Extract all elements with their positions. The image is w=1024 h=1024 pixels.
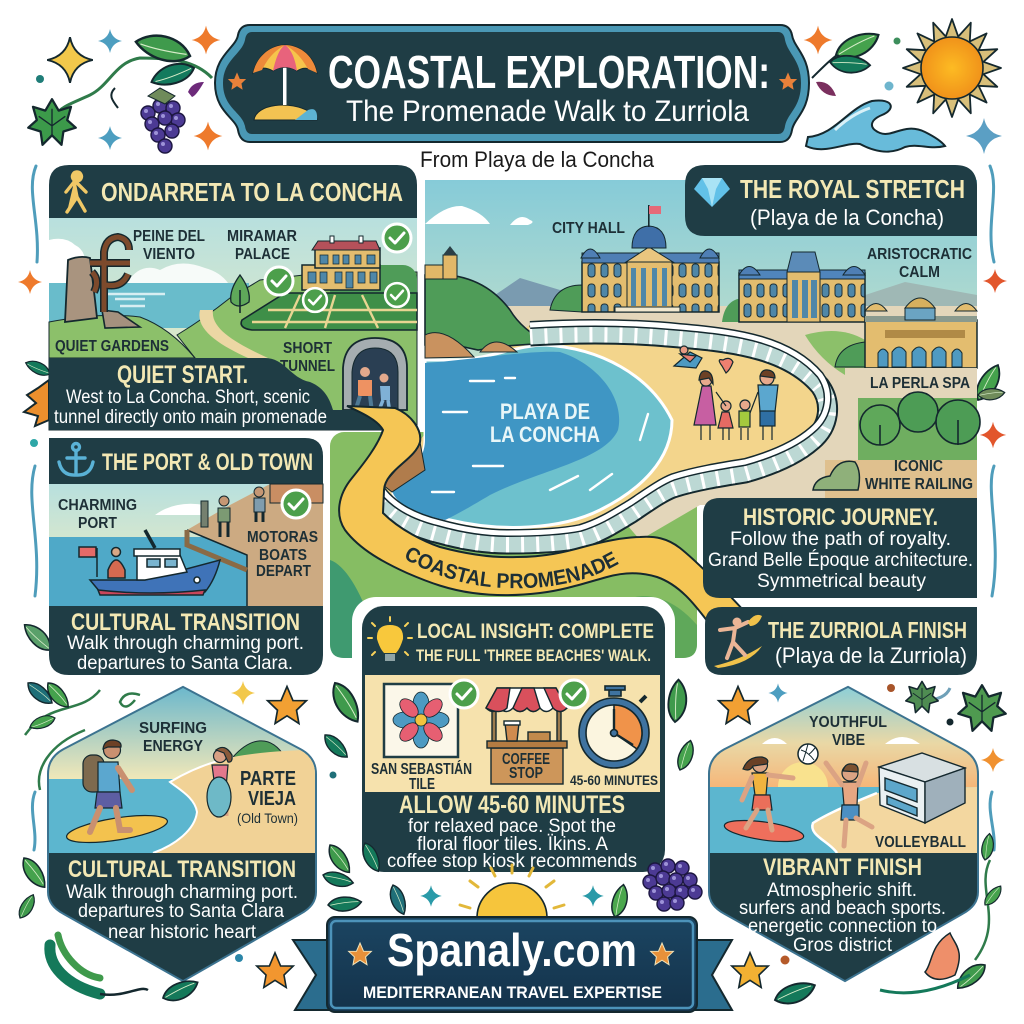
label: stop: STOP (509, 765, 543, 782)
checkmark 4 (385, 283, 409, 307)
label: coffee: COFFEE (502, 751, 550, 768)
distant hills (470, 278, 725, 312)
label: vieja: VIEJA (248, 788, 296, 810)
body line 2: tunnel directly onto main promenade (54, 407, 327, 428)
heading: vibrant finish: VIBRANT FINISH (763, 854, 922, 881)
panel: zurriola finish (705, 607, 977, 675)
ribbon left (293, 940, 345, 1010)
garden grid (241, 293, 417, 330)
heading: the port: THE PORT & OLD TOWN (102, 449, 313, 476)
heading: the royal stretch: THE ROYAL STRETCH (740, 174, 965, 204)
body line 3: near historic heart (108, 922, 257, 943)
label: energy: ENERGY (143, 738, 203, 755)
building: la perla spa (835, 298, 977, 368)
subheading: (Playa de la Zurriola) (775, 643, 967, 668)
label: miramar: MIRAMAR (227, 228, 297, 245)
label: old town: (Old Town) (237, 810, 298, 826)
label: tunnel: TUNNEL (280, 358, 335, 375)
label: surfing: SURFING (139, 720, 207, 737)
body line 1: Walk through charming port. (66, 882, 298, 903)
icon: stopwatch (579, 686, 649, 768)
body line 1: Atmospheric shift. (767, 880, 917, 901)
heading: ondarreta: ONDARRETA TO LA CONCHA (101, 177, 403, 207)
body line 3: Symmetrical beauty (757, 571, 926, 592)
panel: surfing energy hexagon (49, 688, 316, 983)
panel: main bay map (382, 180, 980, 544)
checkmark: port (282, 490, 310, 518)
body line 2: departures to Santa Clara (78, 901, 284, 922)
text panel: quiet start (49, 358, 385, 430)
label: san sebastian: SAN SEBASTIÁN (371, 759, 472, 778)
icon: right star (651, 943, 673, 965)
trees (858, 392, 980, 461)
building: palace (722, 252, 865, 322)
icon: san sebastian tile (384, 684, 458, 757)
label: short: SHORT (283, 340, 332, 357)
body line 2: Grand Belle Époque architecture. (708, 550, 973, 571)
subheading: from: From Playa de la Concha (420, 147, 655, 172)
building: miramar palace (302, 236, 380, 290)
body line 2: floral floor tiles. Ïkins. A (417, 834, 608, 855)
figure: surfer with backpack (65, 740, 169, 848)
icon: anchor (59, 444, 93, 475)
heading line 1: LOCAL INSIGHT: COMPLETE (417, 620, 654, 643)
heading: cultural transition: CULTURAL TRANSITION (68, 856, 296, 883)
brown sea wall (383, 442, 425, 492)
decoration: top left vine and grapes (28, 25, 222, 153)
body line 3: coffee stop kiosk recommends (387, 851, 637, 872)
label: white railing: WHITE RAILING (865, 476, 973, 493)
label: playa de: PLAYA DE (500, 399, 590, 424)
people on dock (201, 487, 265, 537)
promenade ground (505, 306, 977, 540)
decoration: side squiggles and sparks (18, 166, 1008, 850)
icon: right star (779, 72, 797, 90)
ribbon right (680, 940, 732, 1010)
dock and quay (187, 484, 323, 606)
brand name: Spanaly.com (387, 924, 637, 976)
sculpture: peine del viento (65, 237, 140, 328)
people in tunnel (355, 367, 390, 414)
cream strip (365, 675, 660, 792)
icon: left star (228, 72, 246, 90)
tagline: MEDITERRANEAN TRAVEL EXPERTISE (363, 983, 662, 1002)
panel header (49, 165, 417, 218)
panel: local insight (352, 597, 675, 882)
icon: walker (66, 172, 86, 212)
railing: white promenade fence (382, 323, 828, 544)
panel: ondarreta to la concha (49, 165, 417, 430)
label: port: PORT (78, 515, 117, 532)
body line 1: Follow the path of royalty. (730, 529, 951, 550)
checkmark 2 (265, 267, 293, 295)
title banner (215, 25, 809, 142)
decoration: top right sun, leaves and wave (804, 19, 1002, 154)
figure: volleyball boy (826, 763, 872, 846)
label: boats: BOATS (259, 547, 307, 564)
tree (231, 275, 249, 313)
heading: quiet start: QUIET START. (117, 361, 248, 389)
icon: bottom grapes (643, 859, 702, 911)
label: la concha: LA CONCHA (490, 422, 600, 447)
heading: allow: ALLOW 45-60 MINUTES (399, 791, 625, 819)
label strip: la perla spa (845, 368, 977, 396)
subheading: (Playa de la Concha) (750, 205, 944, 230)
decoration: lower left vines and stars (14, 677, 407, 1003)
label: peine del: PEINE DEL (133, 228, 205, 245)
label: vibe: VIBE (832, 732, 865, 749)
label: tile: TILE (409, 776, 435, 793)
panel: youthful vibe hexagon (710, 688, 977, 983)
figure: woman with surfboard (207, 747, 232, 817)
label strip: iconic railing (825, 460, 977, 500)
label: quiet gardens: QUIET GARDENS (55, 338, 169, 355)
heading: cultural transition: CULTURAL TRANSITION (71, 609, 300, 636)
water: bay (392, 345, 672, 527)
checkmark: tile (450, 680, 478, 708)
decoration: lower right vines and stars (606, 679, 1006, 1006)
label: depart: DEPART (256, 563, 311, 580)
label: iconic: ICONIC (894, 458, 943, 475)
body line 2: departures to Santa Clara. (77, 653, 293, 674)
figure: surfer girl (723, 757, 805, 845)
heading: title: COASTAL EXPLORATION: (328, 46, 770, 98)
green land under map (330, 432, 697, 658)
icon: bottom sun (420, 864, 604, 916)
panel: the port and old town (49, 438, 323, 675)
people: family on the beach (674, 346, 778, 440)
heading: HISTORIC JOURNEY. (743, 504, 938, 531)
clouds (425, 206, 490, 224)
body line 1: Walk through charming port. (67, 633, 304, 654)
label: youthful: YOUTHFUL (809, 714, 887, 731)
heading: THE ZURRIOLA FINISH (768, 617, 967, 643)
label: viento: VIENTO (143, 246, 195, 263)
route label: COASTAL PROMENADE (406, 548, 619, 588)
building: lighthouse and headland (425, 246, 548, 358)
label: aristocratic: ARISTOCRATIC (867, 246, 972, 263)
body line 1: for relaxed pace. Spot the (408, 816, 616, 837)
heading: subtitle: The Promenade Walk to Zurriola (346, 95, 749, 128)
checkmark 3 (303, 288, 327, 312)
icon: diamond (694, 178, 730, 207)
icon: left star (349, 943, 371, 965)
label: motoras: MOTORAS (247, 529, 318, 546)
label: la perla spa: LA PERLA SPA (870, 375, 970, 392)
footer banner (293, 917, 732, 1012)
checkmark 1 (383, 224, 411, 252)
checkmark: kiosk (560, 680, 588, 708)
label: minutes: 45-60 MINUTES (570, 772, 658, 788)
route: coastal promenade (338, 405, 742, 620)
body line 4: Gros district (793, 935, 893, 956)
label: city hall: CITY HALL (552, 220, 625, 237)
label: parte: PARTE (240, 768, 296, 790)
icon: volleyball (798, 744, 818, 764)
body line 3: energetic connection to (748, 916, 937, 937)
panel: royal stretch header (685, 165, 977, 236)
icon: fishing boat (79, 530, 220, 595)
label: charming: CHARMING (58, 497, 137, 514)
beach sand (382, 323, 828, 533)
body line 2: surfers and beach sports. (739, 898, 946, 919)
body line 1: West to La Concha. Short, scenic (66, 387, 310, 408)
icon: surfer (714, 615, 762, 668)
icon: coffee kiosk (486, 688, 567, 784)
label: calm: CALM (899, 264, 940, 281)
building: grey block (879, 753, 965, 823)
heading line 2: THE FULL 'THREE BEACHES' WALK. (416, 646, 651, 665)
icon: rocks (813, 461, 859, 490)
label: palace: PALACE (235, 246, 290, 263)
tunnel (343, 338, 407, 410)
icon: light bulb (368, 617, 412, 661)
building: city hall (550, 205, 719, 312)
panel: historic journey (703, 498, 977, 598)
lawn (805, 331, 865, 375)
label: volleyball: VOLLEYBALL (875, 834, 966, 851)
icon: beach umbrella on island (253, 45, 317, 120)
